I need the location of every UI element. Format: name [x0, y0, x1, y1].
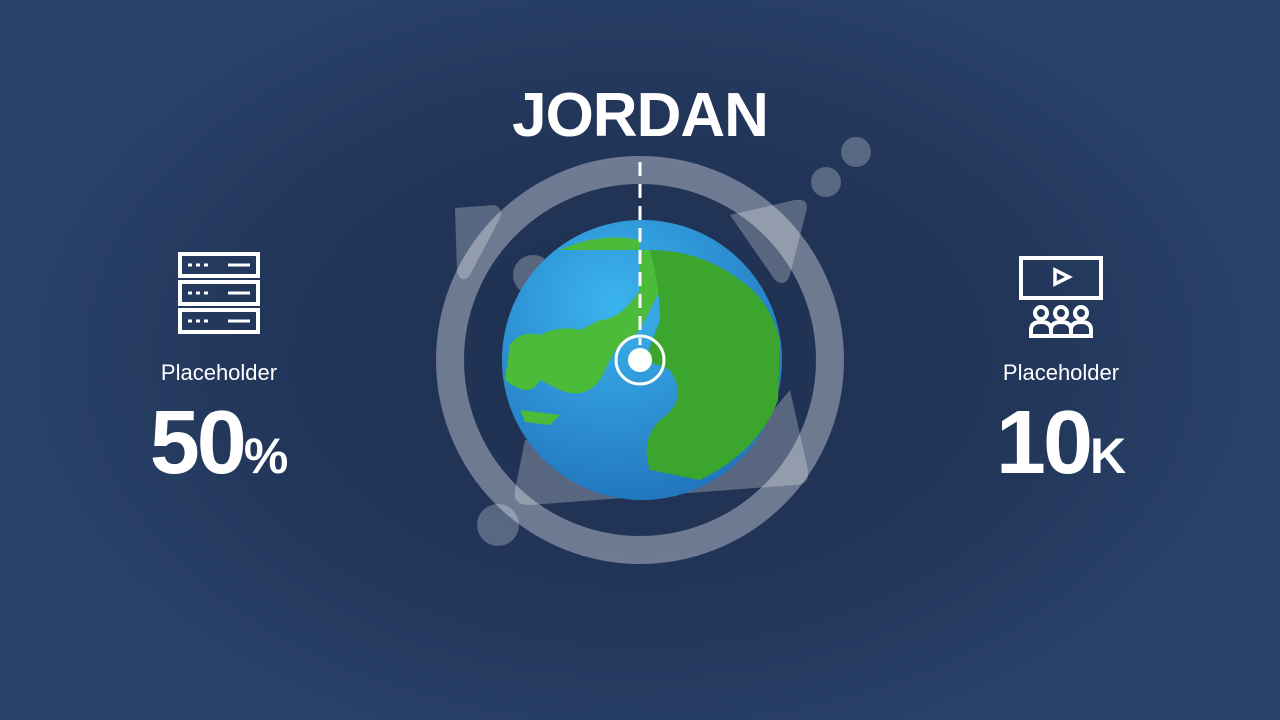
label: Placeholder — [1003, 360, 1119, 385]
marker — [616, 162, 664, 384]
right stat panel — [996, 256, 1126, 493]
value: 10K — [996, 393, 1126, 493]
left stat panel — [150, 252, 288, 493]
decorative shapes — [455, 137, 871, 546]
title: JORDAN — [512, 81, 768, 150]
value: 50% — [150, 393, 288, 493]
label: Placeholder — [161, 360, 277, 385]
ring — [450, 170, 830, 550]
globe graphic — [436, 137, 871, 564]
globe — [502, 220, 782, 500]
icon: presentation audience — [1019, 256, 1103, 338]
icon: server — [178, 252, 260, 334]
